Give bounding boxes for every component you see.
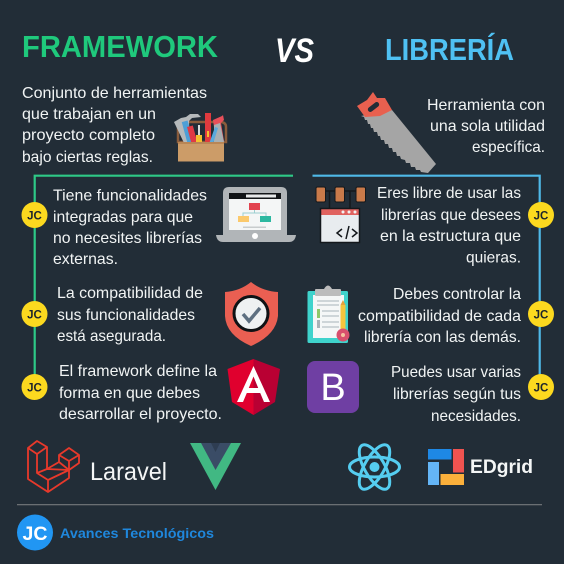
text: framework point 3 [59,363,222,423]
icon: code window [316,187,366,242]
icon: bootstrap logo: B [320,367,346,409]
logo: edgrid: EDgrid [470,457,533,478]
text: framework point 2: está asegurada. [57,328,166,345]
text: librería point 3: librerías según tus [393,386,521,403]
connector: framework line [35,176,293,388]
text: librería point 1: en la estructura que [380,228,521,245]
connector: librería line [312,176,540,388]
text: framework point 1: Tiene funcionalidades [53,188,207,204]
logo: jc avances tecnológicos: Avances Tecnológicos [60,525,214,541]
badge: left 2: JC [27,310,42,322]
text: framework point 1: integradas para que [53,209,193,226]
text: framework point 3: desarrollar el proyecto. [59,406,222,423]
badge: left 3: JC [27,382,42,394]
text: librería point 3: Puedes usar varias [391,364,521,381]
logo: laravel [28,441,167,492]
text: librería definition: Herramienta con [427,97,545,114]
badge: right 2: JC [534,310,548,322]
logo: jc avances tecnológicos: JC [22,524,48,545]
badge: left 1 [22,202,48,228]
icon: laptop [216,187,296,242]
badge: left 3 [22,374,48,400]
icon: bootstrap logo [307,361,359,413]
badge: right 1 [528,202,554,228]
text: librería point 2 [358,286,521,346]
text: librería definition: específica. [472,139,545,156]
text: framework point 1: no necesites librerías [53,230,202,247]
text: framework point 3: forma en que debes [59,385,200,402]
logo: laravel: Laravel [90,458,167,486]
badge: left 2 [22,301,48,327]
icon: hand saw [357,92,436,173]
text: librería definition [427,97,545,156]
icon: clipboard [308,286,350,343]
text: framework point 2: La compatibilidad de [57,285,203,302]
text: framework point 3: El framework define la [59,363,217,380]
text: framework definition: proyecto completo [22,127,155,144]
title: librería: LIBRERÍA [385,32,514,67]
text: librería point 1: librerías que desees [381,207,521,224]
text: librería point 2: compatibilidad de cada [358,308,521,325]
text: librería definition: una sola utilidad [430,118,545,135]
title: framework: FRAMEWORK [22,30,218,64]
text: librería point 1: quieras. [466,250,521,266]
icon: angular logo [228,359,280,415]
logo: jc avances tecnológicos [17,514,214,550]
badge: right 1: JC [534,210,548,222]
text: framework definition: bajo ciertas reglas. [22,149,153,166]
badge: right 3 [528,374,554,400]
text: librería point 1 [377,185,521,266]
text: librería point 3: necesidades. [431,408,521,425]
logo: vue [190,443,241,490]
text: framework definition: Conjunto de herramientas [22,85,207,102]
title: vs: VS [275,32,314,70]
badge: right 3: JC [534,382,548,394]
icon: shield check [225,282,278,346]
text: framework point 1: externas. [53,251,118,268]
text: librería point 1: Eres libre de usar las [377,185,521,202]
divider [17,504,542,505]
text: librería point 3 [391,364,521,425]
text: framework point 2: sus funcionalidades [57,307,195,324]
badge: left 1: JC [27,210,42,222]
text: framework definition [22,85,207,166]
text: framework point 2 [57,285,203,345]
icon: toolbox [174,113,226,162]
text: framework point 1 [53,188,207,268]
badge: right 2 [528,301,554,327]
logo: edgrid [428,449,533,485]
text: framework definition: que trabajan en un [22,106,156,123]
logo: react [350,440,400,494]
text: librería point 2: Debes controlar la [393,286,521,303]
text: librería point 2: librería con las demás. [364,329,521,346]
